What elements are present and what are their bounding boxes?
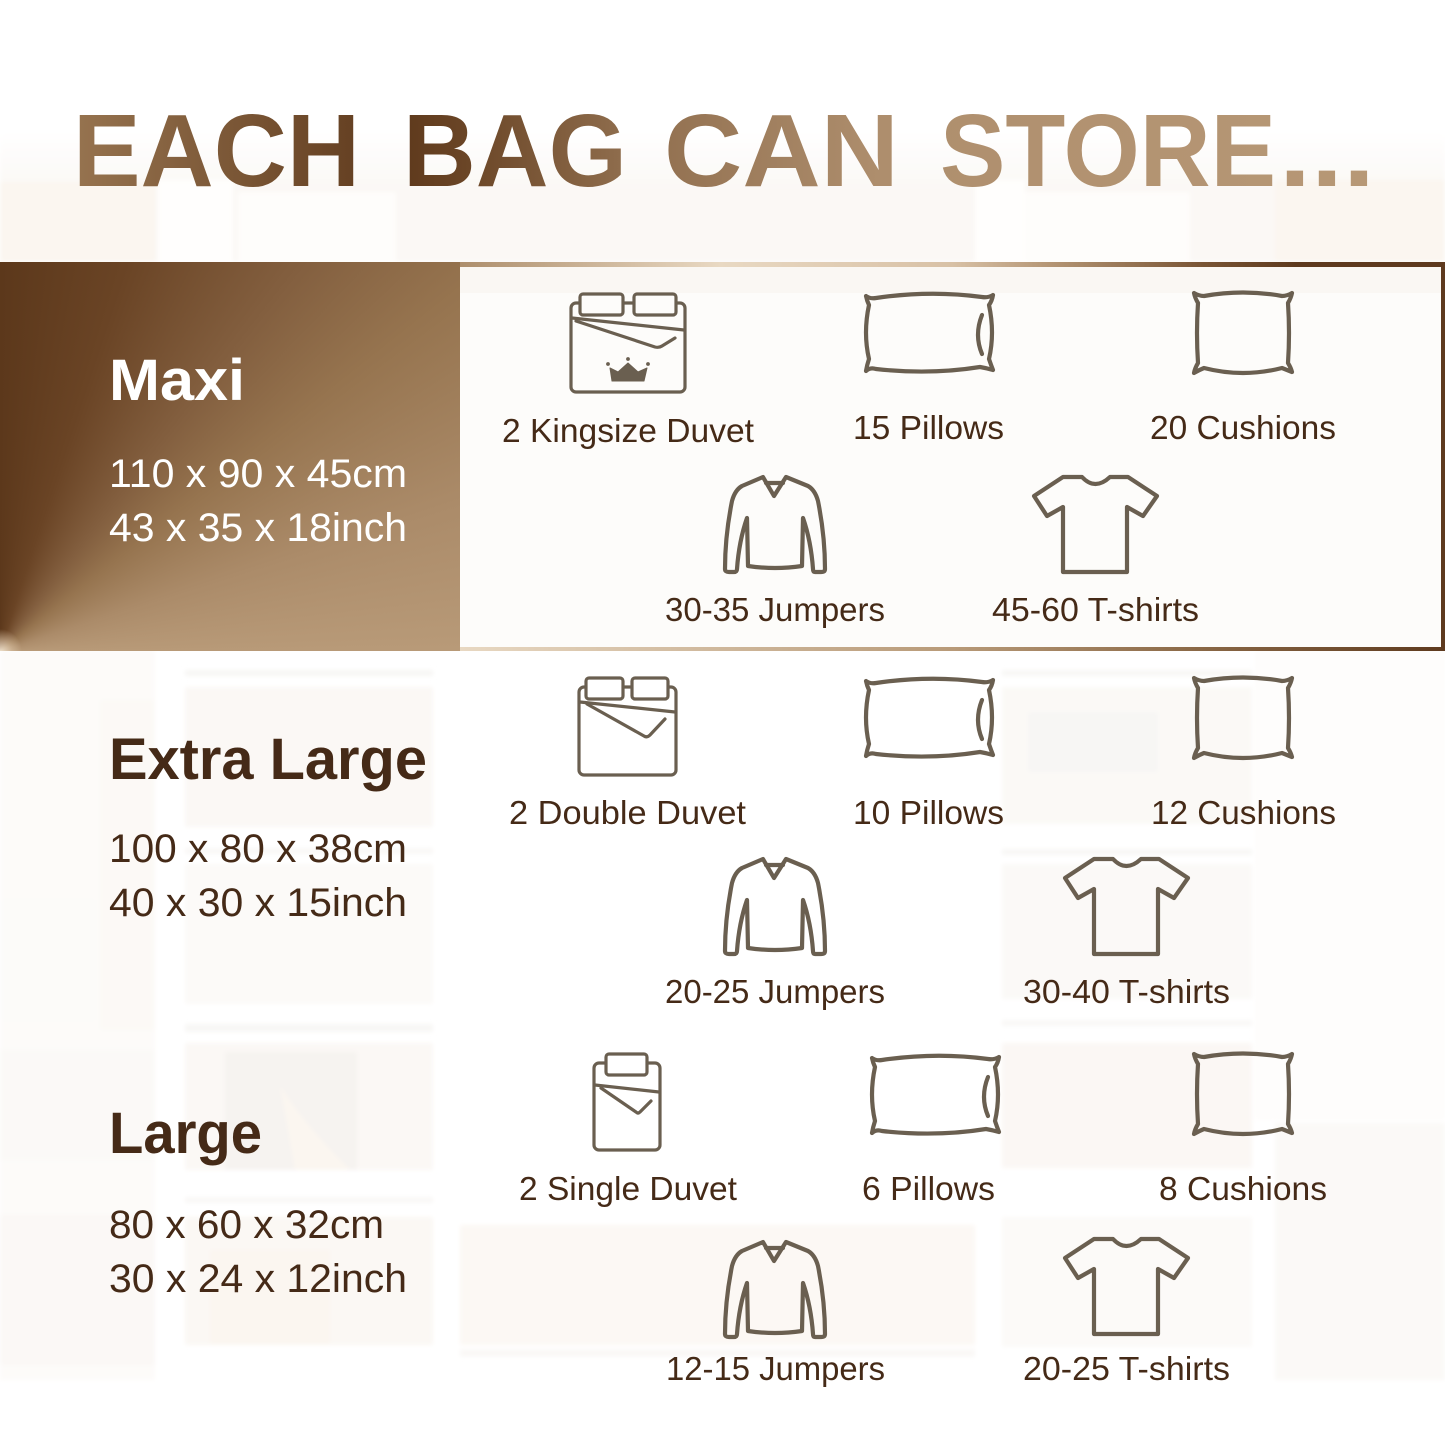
- icon: t-shirt: [1065, 1239, 1188, 1334]
- large heading: 80 x 60 x 32cm: [109, 1203, 384, 1247]
- label: 2 Double Duvet: 2 Double Duvet: [509, 794, 746, 831]
- large heading: 30 x 24 x 12inch: [109, 1257, 407, 1301]
- label: 30-35 Jumpers: 30-35 Jumpers: [665, 591, 885, 628]
- title: [73, 93, 1375, 208]
- icon: jumper: [725, 1242, 825, 1337]
- icon: kingsize duvet: [571, 294, 685, 392]
- maxi heading: [109, 348, 407, 550]
- extra large heading: Extra Large: [109, 727, 427, 792]
- large heading: [109, 1101, 407, 1301]
- title: CAN: [664, 93, 899, 208]
- label: 10 Pillows: 10 Pillows: [853, 794, 1004, 831]
- extra large heading: 40 x 30 x 15inch: [109, 881, 407, 925]
- icon: pillow: [866, 294, 993, 372]
- icon: double duvet: [579, 678, 676, 775]
- maxi heading: Maxi: [109, 348, 245, 413]
- title: STORE: [940, 93, 1276, 208]
- icon: cushion: [1194, 1054, 1292, 1134]
- label: 15 Pillows: 15 Pillows: [853, 409, 1004, 446]
- icon: t-shirt: [1034, 477, 1157, 572]
- label: 6 Pillows: 6 Pillows: [862, 1170, 995, 1207]
- label: 12-15 Jumpers: 12-15 Jumpers: [666, 1350, 885, 1387]
- label: 12 Cushions: 12 Cushions: [1151, 794, 1336, 831]
- label: 8 Cushions: 8 Cushions: [1159, 1170, 1327, 1207]
- large heading: Large: [109, 1101, 262, 1166]
- label: 20-25 Jumpers: 20-25 Jumpers: [665, 973, 885, 1010]
- title: EACH: [73, 93, 360, 208]
- extra large heading: [109, 727, 427, 925]
- icon: pillow: [872, 1056, 999, 1134]
- icon: pillow: [866, 679, 993, 757]
- label: 30-40 T-shirts: 30-40 T-shirts: [1023, 973, 1230, 1010]
- maxi header block: [0, 262, 460, 651]
- label: 20 Cushions: 20 Cushions: [1150, 409, 1336, 446]
- maxi contents frame: [460, 262, 1445, 651]
- maxi heading: 43 x 35 x 18inch: [109, 506, 407, 550]
- label: 45-60 T-shirts: 45-60 T-shirts: [992, 591, 1199, 628]
- icon: single duvet: [594, 1054, 660, 1150]
- title: ...: [1279, 93, 1375, 208]
- extra large heading: 100 x 80 x 38cm: [109, 827, 407, 871]
- title: BAG: [403, 93, 627, 208]
- icon: t-shirt: [1065, 859, 1188, 954]
- icon: jumper: [725, 859, 825, 954]
- icon: cushion: [1194, 678, 1292, 758]
- label: 2 Kingsize Duvet: 2 Kingsize Duvet: [502, 412, 754, 449]
- label: 20-25 T-shirts: 20-25 T-shirts: [1023, 1350, 1230, 1387]
- maxi heading: 110 x 90 x 45cm: [109, 452, 407, 496]
- icon: jumper: [725, 477, 825, 572]
- label: 2 Single Duvet: 2 Single Duvet: [519, 1170, 737, 1207]
- icon: cushion: [1194, 292, 1292, 373]
